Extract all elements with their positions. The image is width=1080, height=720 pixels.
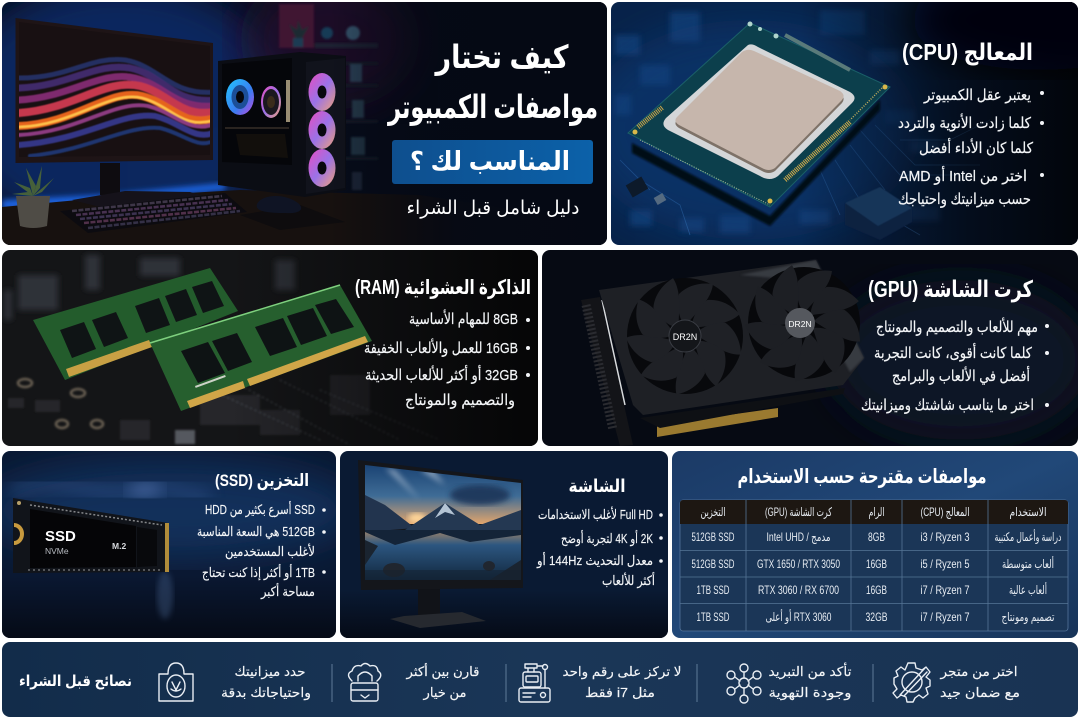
specs table: [680, 500, 1068, 631]
bullets: كلما كانت أقوى، كانت التجربة: [874, 343, 1033, 362]
graphics card: [581, 260, 864, 446]
bullets: 32GB أو أكثر للألعاب الحديثة: [365, 365, 518, 384]
bullets: حسب ميزانيتك واحتياجك: [898, 191, 1031, 208]
tip: budget: واحتياجاتك بدقة: [221, 685, 311, 701]
monitor: [16, 18, 218, 212]
row: mid gaming: i5 / Ryzen 5: [920, 557, 970, 571]
bullets: مساحة أكبر: [260, 583, 315, 600]
tip: cooling: [768, 662, 852, 701]
row: mid gaming: [692, 556, 1054, 572]
board background: [4, 255, 440, 445]
row: mid gaming: GTX 1650 / RTX 3050: [757, 557, 840, 571]
row: high gaming: i7 / Ryzen 7: [920, 583, 970, 597]
mouse: [257, 196, 301, 213]
plant: [12, 166, 54, 228]
tips heading: نصائح قبل الشراء: [19, 673, 132, 690]
bullets: معدل التحديث 144Hz أو: [536, 552, 653, 569]
row: study and office: [692, 529, 1062, 545]
table header row: الاستخدام: [1010, 505, 1046, 519]
table header row: الرام: [868, 505, 884, 520]
bullets: اختر ما يناسب شاشتك وميزانيتك: [861, 397, 1034, 414]
table header row: كرت الشاشة (GPU): [765, 505, 832, 520]
tip: compare: من خيار: [422, 685, 466, 701]
CPU chip: [628, 22, 890, 226]
icon: budget bag: [159, 663, 193, 701]
bullets: أفضل في الألعاب والبرامج: [892, 366, 1030, 386]
SSD drive: M.2: [112, 541, 126, 551]
bullets: لأغلب المستخدمين: [225, 543, 315, 560]
row: mid gaming: ألعاب متوسطة: [1002, 556, 1054, 572]
row: design and editing: 1TB SSD: [696, 610, 730, 624]
tagline: دليل شامل قبل الشراء: [406, 198, 580, 219]
back RAM stick: [33, 268, 238, 380]
bullets: 1TB أو أكثر إذا كنت تحتاج: [202, 564, 315, 581]
bullets: [536, 506, 663, 589]
row: mid gaming: 16GB: [866, 557, 887, 571]
icon: warranty gear: [893, 663, 930, 702]
tip: cooling: وجودة التهوية: [768, 685, 852, 701]
row: study and office: i3 / Ryzen 3: [920, 530, 970, 544]
SSD drive: [13, 498, 169, 573]
circuit board background: [615, 10, 940, 233]
subtitle button: المناسب لك ؟: [410, 146, 570, 176]
row: high gaming: ألعاب عالية: [1009, 582, 1047, 597]
icon: benchmark: [519, 664, 550, 702]
row: mid gaming: 512GB SSD: [692, 557, 735, 571]
bullets: [898, 87, 1044, 208]
row: design and editing: RTX 3060 أو أعلى: [766, 609, 832, 625]
row: study and office: مدمج / Intel UHD: [766, 530, 830, 544]
bullets: [861, 317, 1049, 414]
graphics card: DR2N: [788, 319, 812, 329]
row: high gaming: RTX 3060 / RX 6700: [758, 583, 839, 597]
keyboard: [60, 193, 247, 233]
row: study and office: 512GB SSD: [692, 530, 735, 544]
desk: [2, 190, 607, 245]
tip: store: [939, 664, 1020, 701]
icon: cooling: [727, 664, 761, 703]
tip: do not focus on one number: [562, 664, 682, 700]
row: design and editing: i7 / Ryzen 7: [920, 610, 970, 624]
row: study and office: 8GB: [868, 530, 885, 544]
title text: [387, 39, 598, 126]
heading: الشاشة: [568, 476, 626, 496]
heading: كرت الشاشة (GPU): [868, 276, 1033, 303]
graphics card: DR2N: [673, 332, 697, 342]
tip: compare: قارن بين أكثر: [405, 663, 480, 680]
table heading: مواصفات مقترحة حسب الاستخدام: [738, 466, 986, 488]
panel: SSD: [2, 451, 336, 638]
blue LED strip: [2, 183, 225, 210]
heading: المعالج (CPU): [902, 39, 1033, 66]
panel: buying tips: [2, 642, 1078, 717]
table header row: المعالج (CPU): [920, 505, 970, 519]
bullets: 512GB هي السعة المناسبة: [197, 524, 315, 539]
bullets: كلما زادت الأنوية والتردد: [898, 113, 1032, 132]
panel: GPU: [542, 250, 1078, 446]
panel: display: [340, 451, 668, 638]
bullets: مهم للألعاب والتصميم والمونتاج: [876, 317, 1038, 337]
panel: hero title: [2, 2, 607, 245]
tip: cooling: تأكد من التبريد: [768, 662, 852, 680]
table header row: التخزين: [700, 505, 726, 520]
panel: CPU: [611, 2, 1078, 245]
heading: التخزين (SSD): [215, 471, 309, 491]
subtitle button: [392, 140, 593, 184]
bullets: كلما كان الأداء أفضل: [919, 138, 1034, 157]
bullets: Full HD لأغلب الاستخدامات: [538, 506, 653, 522]
monitor: [358, 460, 523, 628]
row: high gaming: 16GB: [866, 583, 887, 597]
tip: store: مع ضمان جيد: [940, 685, 1020, 701]
bullets: أكثر للألعاب: [602, 572, 655, 589]
title text: كيف تختار: [434, 39, 569, 76]
bullets: يعتبر عقل الكمبيوتر: [923, 87, 1031, 104]
tip: do not focus on one number: مثل i7 فقط: [585, 685, 655, 700]
table header row: [700, 505, 1046, 520]
tip: budget: [221, 664, 311, 701]
SSD drive: SSD: [45, 528, 76, 545]
row: high gaming: 1TB SSD: [696, 583, 730, 597]
front RAM stick: [150, 285, 372, 411]
row: design and editing: تصميم ومونتاج: [1002, 610, 1054, 625]
icon: compare: [348, 664, 381, 701]
row: high gaming: [696, 582, 1047, 597]
bullets: 8GB للمهام الأساسية: [409, 309, 518, 328]
tip: budget: حدد ميزانيتك: [234, 664, 306, 680]
bullets: والتصميم والمونتاج: [405, 392, 515, 410]
row: design and editing: 32GB: [866, 610, 888, 624]
wall poster and shelf: [279, 4, 378, 190]
bullets: اختر من Intel أو AMD: [899, 166, 1027, 185]
SSD drive: NVMe: [45, 546, 69, 556]
bullets: [364, 309, 530, 410]
tip: compare: [405, 663, 480, 701]
small chip: [845, 187, 912, 240]
PC case: [218, 52, 346, 197]
bullets: SSD أسرع بكثير من HDD: [205, 501, 315, 518]
bullets: [197, 501, 326, 600]
row: design and editing: [696, 609, 1054, 625]
tip: do not focus on one number: لا تركز على رقم واحد: [562, 664, 682, 680]
tip: store: اختر من متجر: [939, 664, 1018, 680]
panel: RAM: [2, 250, 538, 446]
panel: recommended specs table: [672, 451, 1078, 638]
bullets: 2K أو 4K لتجربة أوضح: [561, 530, 653, 547]
bullets: 16GB للعمل والألعاب الخفيفة: [364, 338, 518, 357]
